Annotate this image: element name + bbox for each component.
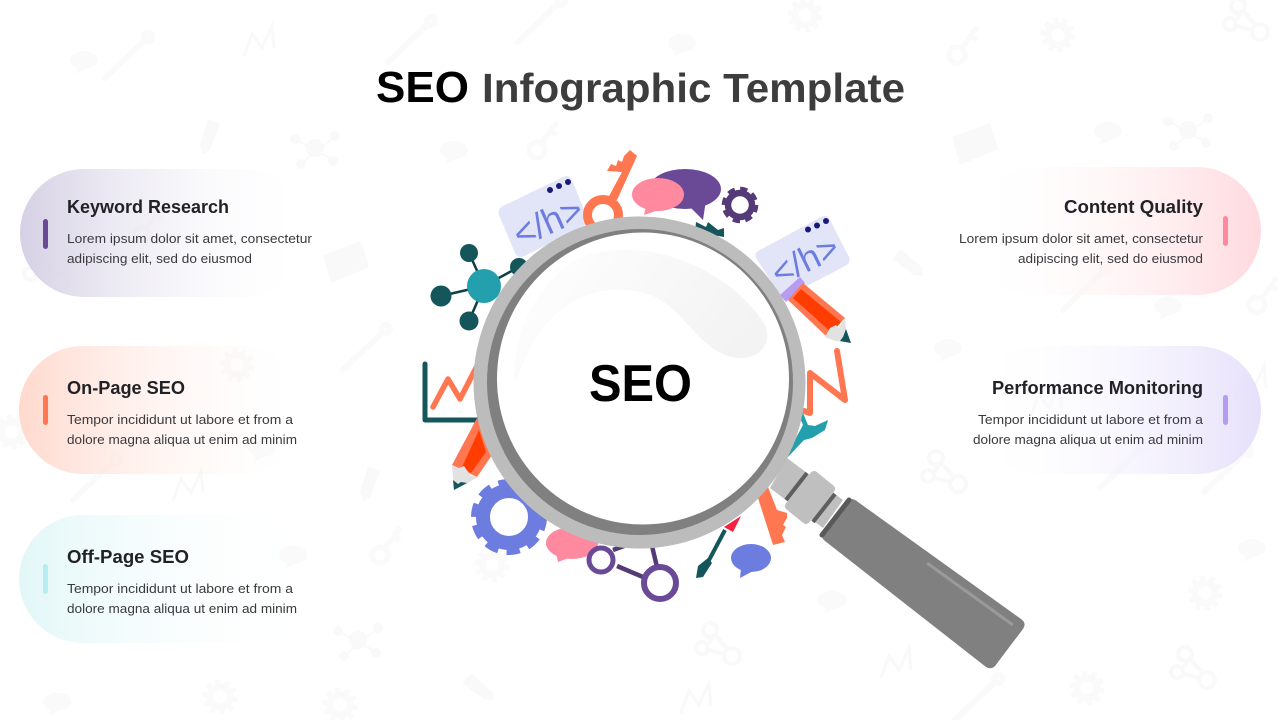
lens highlight (515, 250, 767, 385)
panel: Performance Monitoring: Performance Monitoring (992, 378, 1203, 398)
panel: On-Page SEO: dolore magna aliqua ut enim ad minim (67, 433, 297, 447)
panel: Keyword Research: adipiscing elit, sed do eiusmod (67, 252, 252, 266)
icon: purple link network (589, 546, 676, 599)
icon: code window left: </h> (507, 188, 589, 255)
icon: key top (588, 150, 637, 230)
magnifier rings (474, 216, 806, 548)
panel: Off-Page SEO: Tempor incididunt ut labore et from a (67, 582, 293, 596)
title: SEO (376, 63, 469, 112)
icon: speech bubbles top (632, 169, 721, 220)
icon: network (430, 244, 528, 330)
panel: Content Quality: Content Quality (1064, 197, 1203, 217)
icon: pencil left (452, 418, 492, 490)
icon: code window right: </h> (765, 228, 845, 293)
icon: pencil right (780, 277, 851, 343)
icon: code window right (756, 216, 850, 297)
panel: On-Page SEO (19, 346, 309, 474)
panel: Performance Monitoring: dolore magna aliqua ut enim ad minim (973, 433, 1203, 447)
magnifier handle (770, 458, 1025, 668)
panel: Off-Page SEO: dolore magna aliqua ut enim ad minim (67, 602, 297, 616)
icon: wrench (787, 413, 828, 458)
icon: key bottom (758, 487, 787, 545)
panel: Off-Page SEO (19, 515, 309, 643)
panel: On-Page SEO: Tempor incididunt ut labore et from a (67, 413, 293, 427)
panel: Keyword Research: Keyword Research (67, 197, 229, 217)
panel: Content Quality: Lorem ipsum dolor sit amet, consectetur (959, 232, 1203, 246)
icon: blue bubble (731, 544, 771, 578)
magnifier (474, 216, 1025, 668)
icon: zigzag right (804, 351, 845, 413)
icon: chart left (425, 364, 482, 420)
panel: On-Page SEO: On-Page SEO (67, 378, 185, 398)
panel: Keyword Research (20, 169, 312, 297)
title: subtitle part: Infographic Template (482, 65, 905, 111)
center label: SEO (589, 355, 692, 413)
panel: Performance Monitoring: Tempor incididunt ut labore et from a (978, 413, 1203, 427)
icon: screwdriver (696, 516, 741, 578)
panel: Performance Monitoring (971, 346, 1261, 474)
panel: Content Quality: adipiscing elit, sed do eiusmod (1018, 252, 1203, 266)
icon: blue gear (475, 483, 543, 551)
panel: Off-Page SEO: Off-Page SEO (67, 547, 189, 567)
icon: pink bubble bottom (546, 527, 598, 562)
panel: Keyword Research: Lorem ipsum dolor sit amet, consectetur (67, 232, 312, 246)
icon: purple gear (724, 189, 756, 221)
icon: dark gear top (695, 222, 724, 237)
panel: Content Quality (959, 167, 1261, 295)
